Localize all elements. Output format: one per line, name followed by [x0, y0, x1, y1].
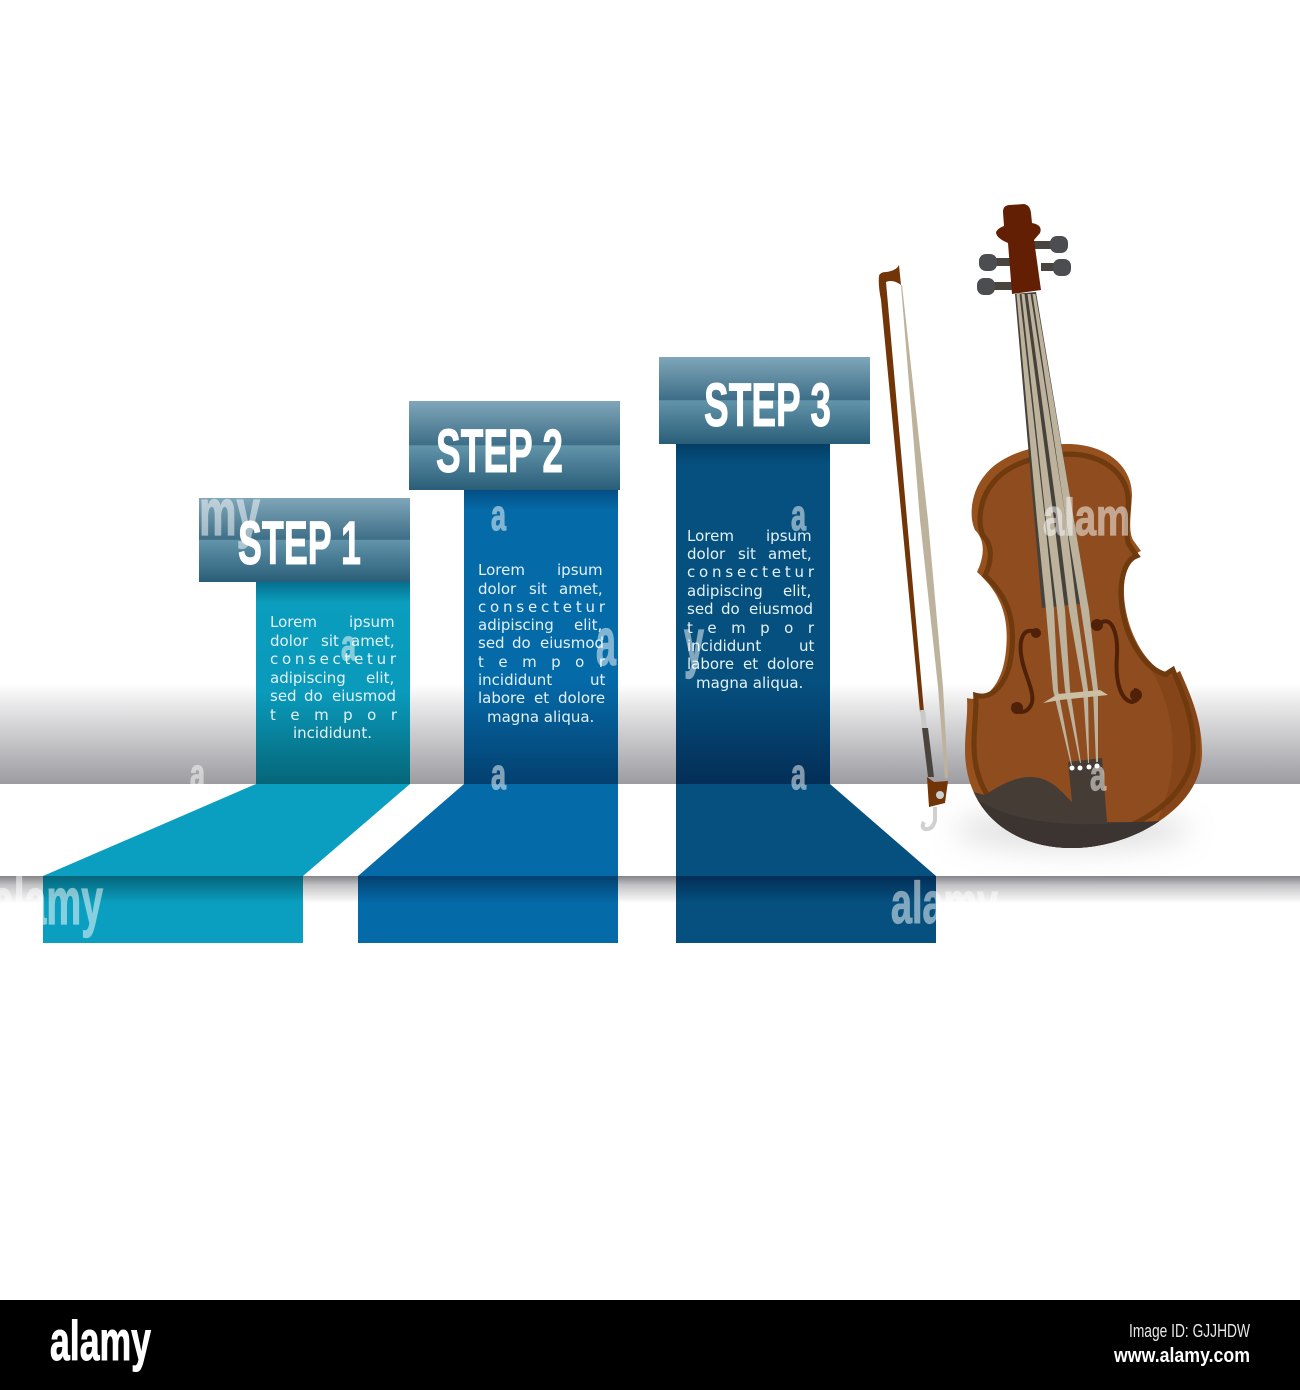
- text block: step 2: do: [512, 634, 531, 652]
- violin strings: [1016, 294, 1098, 765]
- violin bridge: [1043, 690, 1108, 703]
- violin pegs: [977, 236, 1071, 295]
- text block: step 2: Lorem: [478, 561, 525, 579]
- text block: step 3: dolore: [767, 655, 814, 673]
- heading: step 1: STEP 1: [238, 509, 361, 577]
- violin scroll head: [996, 204, 1041, 294]
- footer url: www.alamy.com: [1113, 1345, 1250, 1367]
- text block: step 1: amet,: [351, 632, 395, 650]
- violin top plate: [974, 454, 1193, 838]
- icon: violin bow: [879, 262, 948, 829]
- violin shaded crescent: [1150, 668, 1200, 822]
- text block: step 2: ut: [590, 671, 606, 689]
- watermark overlays: a: [491, 750, 506, 799]
- text block: step 3: et: [743, 655, 758, 673]
- text block: step 1: dolor: [270, 632, 309, 650]
- text block: step 1: eiusmod: [332, 687, 396, 705]
- text block: step 3: [687, 527, 815, 692]
- text block: step 2: amet,: [559, 580, 603, 598]
- panel: step 1: [43, 498, 410, 943]
- footer logo: alamy: [50, 1309, 151, 1372]
- lower grey band: [0, 876, 1300, 903]
- text block: step 2: dolore: [558, 689, 605, 707]
- text block: step 3: labore: [687, 655, 734, 673]
- text block: step 1: incididunt.: [293, 724, 372, 742]
- text block: step 3: consectetur: [687, 563, 815, 581]
- text block: step 2: incididunt: [478, 671, 552, 689]
- text block: step 2: labore: [478, 689, 525, 707]
- text block: step 3: tempor: [687, 619, 815, 637]
- text block: step 2: dolor: [478, 580, 517, 598]
- heading: step 2: STEP 2: [436, 417, 563, 485]
- text block: step 3: eiusmod: [749, 600, 813, 618]
- watermark overlays: a: [341, 621, 356, 670]
- violin body: [965, 444, 1202, 848]
- watermark overlays: my: [199, 475, 260, 549]
- text block: step 3: amet,: [768, 545, 812, 563]
- text block: step 2: [478, 561, 606, 726]
- text block: step 2: magna aliqua.: [487, 708, 594, 726]
- text block: step 3: ipsum: [766, 527, 812, 545]
- text block: step 3: dolor: [687, 545, 726, 563]
- panel: step 3: [659, 357, 936, 943]
- text block: step 2: tempor: [478, 653, 606, 671]
- text block: step 2: eiusmod: [540, 634, 604, 652]
- text block: step 1: adipiscing: [270, 669, 346, 687]
- violin f-holes: [1014, 621, 1139, 712]
- watermark overlays: a: [791, 750, 806, 799]
- text block: step 3: elit,: [783, 582, 811, 600]
- text block: step 1: sed: [270, 687, 297, 705]
- panel: step 2: [358, 401, 620, 943]
- text block: step 3: do: [721, 600, 740, 618]
- watermark overlays: a: [491, 491, 506, 540]
- violin fingerboard: [1015, 292, 1088, 608]
- footer bar: [0, 1300, 1300, 1390]
- upper grey band: [0, 684, 1300, 784]
- text block: step 3: sit: [738, 545, 756, 563]
- text block: step 1: elit,: [366, 669, 394, 687]
- watermark overlays: y: [684, 605, 704, 679]
- text block: step 3: Lorem: [687, 527, 734, 545]
- text block: step 2: elit,: [574, 616, 602, 634]
- text block: step 3: magna aliqua.: [696, 674, 803, 692]
- text block: step 3: ut: [799, 637, 815, 655]
- text block: step 2: sit: [529, 580, 547, 598]
- text block: step 3: incididunt: [687, 637, 761, 655]
- text block: step 1: tempor: [270, 706, 398, 724]
- text block: step 1: Lorem: [270, 613, 317, 631]
- text block: step 3: adipiscing: [687, 582, 763, 600]
- icon: violin: [960, 204, 1210, 860]
- watermark overlays: a: [596, 604, 617, 680]
- watermark overlays: [0, 475, 1130, 938]
- watermark overlays: a: [1090, 751, 1106, 800]
- icon: violin shadow: [954, 810, 1190, 850]
- violin chin rest and tailpiece: [974, 758, 1160, 848]
- text block: step 3: sed: [687, 600, 714, 618]
- text block: step 1: sit: [321, 632, 339, 650]
- watermark overlays: alam: [1043, 489, 1130, 547]
- text block: step 1: [270, 613, 398, 742]
- text block: step 2: ipsum: [557, 561, 603, 579]
- violin purfling: [974, 454, 1193, 838]
- text block: step 2: consectetur: [478, 598, 606, 616]
- text block: step 2: sed: [478, 634, 505, 652]
- watermark overlays: alamy: [891, 871, 998, 936]
- footer image id: Image ID: GJJHDW: [1129, 1321, 1250, 1341]
- text block: step 1: consectetur: [270, 650, 397, 668]
- heading: step 3: STEP 3: [704, 371, 831, 439]
- watermark overlays: a: [791, 491, 806, 540]
- text block: step 2: adipiscing: [478, 616, 554, 634]
- text block: step 1: ipsum: [349, 613, 395, 631]
- watermark overlays: a: [190, 750, 205, 797]
- text block: step 1: do: [304, 687, 323, 705]
- text block: step 2: et: [534, 689, 549, 707]
